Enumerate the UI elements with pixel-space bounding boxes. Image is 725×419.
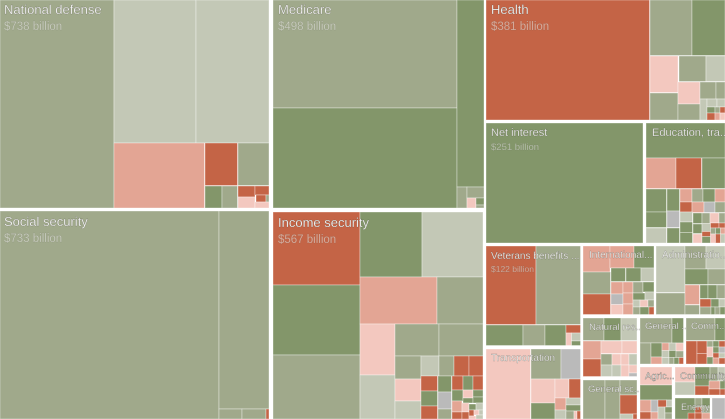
value: medicare: $498 billion (278, 21, 336, 33)
value: net interest: $251 billion (491, 142, 539, 153)
value: national defense: $738 billion (4, 21, 62, 33)
heading: general government: General ... (645, 321, 689, 332)
panel: transportation (486, 349, 580, 419)
value: veterans benefits: $122 billion (491, 264, 534, 274)
panel: grey remainder tile (712, 398, 725, 419)
panel: medicare (273, 0, 484, 208)
heading: agriculture: Agric... (645, 371, 675, 382)
panel: international affairs (583, 246, 654, 314)
panel: education (646, 123, 725, 243)
panel: agriculture (640, 367, 675, 419)
panel: net interest (486, 123, 643, 243)
value: health: $381 billion (491, 21, 549, 33)
heading: general science: General sc... (588, 384, 642, 395)
heading: income security: Income security (278, 215, 370, 230)
panel: community development (675, 367, 725, 395)
panel: veterans benefits (486, 246, 580, 346)
heading: transportation: Transportation (491, 353, 555, 364)
heading: energy: Energy (681, 402, 710, 412)
panel: health (486, 0, 725, 120)
panel: income security (273, 212, 483, 419)
heading: medicare: Medicare (278, 2, 331, 17)
heading: net interest: Net interest (491, 127, 547, 139)
heading: natural resources: Natural res... (589, 322, 643, 333)
heading: international affairs: International... (589, 250, 652, 261)
panel: general government (640, 318, 689, 364)
heading: national defense: National defense (4, 2, 102, 17)
panel: commerce (686, 318, 725, 364)
panel: social security (0, 211, 269, 419)
heading: health: Health (491, 2, 529, 17)
panel: energy (675, 398, 710, 419)
value: social security: $733 billion (4, 233, 62, 245)
value: income security: $567 billion (278, 234, 336, 246)
panel: national defense (0, 0, 269, 208)
panel: general science (583, 380, 642, 419)
panel: natural resources (583, 318, 643, 376)
panel: administration of justice (656, 246, 725, 314)
heading: veterans benefits: Veterans benefits ... (491, 251, 579, 262)
heading: social security: Social security (4, 214, 88, 229)
